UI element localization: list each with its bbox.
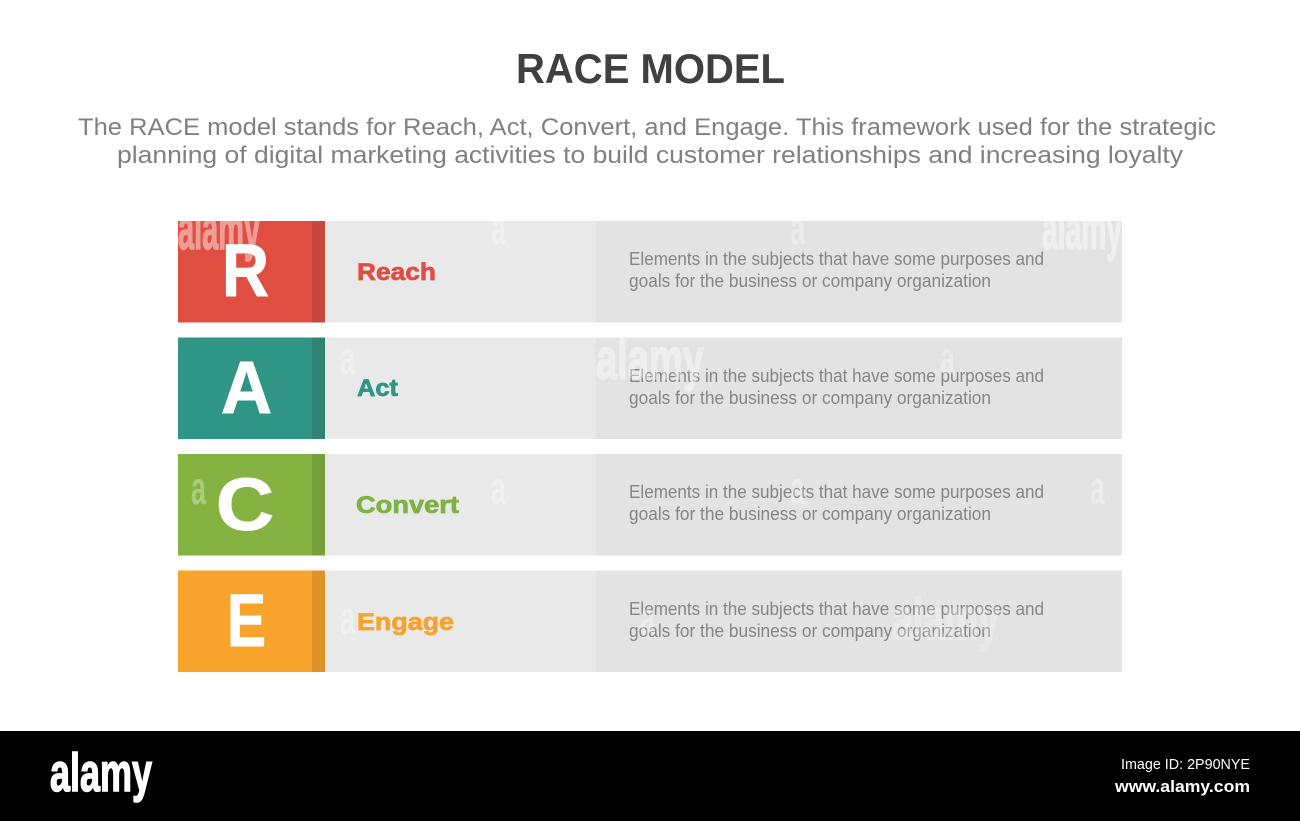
watermarks: alamy <box>892 587 999 652</box>
watermarks <box>178 197 1122 652</box>
label: Act: Act <box>357 375 398 402</box>
label: Convert: Convert <box>356 492 459 519</box>
watermarks: a <box>340 332 355 384</box>
letter C: C <box>216 463 274 546</box>
subtitle <box>78 114 1216 169</box>
footer bar <box>0 731 1300 821</box>
letter A: A <box>221 346 272 429</box>
watermarks: a <box>790 202 805 254</box>
watermarks: a <box>1090 462 1105 514</box>
letter E: E <box>227 579 266 662</box>
image id: Image ID: 2P90NYE <box>1121 756 1250 773</box>
panel: Engage row <box>178 570 1122 672</box>
description: Act <box>629 366 1044 408</box>
description: Engage: goals for the business or company organization <box>629 621 991 641</box>
panel: Reach row <box>178 221 1122 322</box>
watermarks: a <box>340 592 355 644</box>
panel: Act row <box>178 338 1122 439</box>
description: Reach <box>629 249 1044 291</box>
watermarks: a <box>940 332 955 384</box>
Engage letter block <box>178 570 312 672</box>
description: Convert: goals for the business or company organization <box>629 504 991 524</box>
watermarks: a <box>491 202 506 254</box>
description: Act: goals for the business or company organization <box>629 388 991 408</box>
description: Reach: Elements in the subjects that have some purposes and <box>629 249 1044 269</box>
subtitle: The RACE model stands for Reach, Act, Convert, and Engage. This framework used for the strategic <box>78 114 1216 141</box>
label: Engage: Engage <box>357 609 454 636</box>
text: alamy <box>1042 197 1122 262</box>
watermarks: a <box>640 592 655 644</box>
watermarks: a <box>790 462 805 514</box>
watermarks: alamy <box>178 197 260 262</box>
description: Reach: goals for the business or company organization <box>629 271 991 291</box>
description: Convert <box>629 482 1044 524</box>
watermarks: a <box>491 462 506 514</box>
Act letter block <box>178 338 312 439</box>
description: Convert: Elements in the subjects that have some purposes and <box>629 482 1044 502</box>
label: Reach: Reach <box>357 259 436 286</box>
Reach letter block <box>178 221 312 322</box>
Convert letter block <box>178 454 312 556</box>
title: RACE MODEL <box>516 45 785 92</box>
panel: Convert row <box>178 454 1122 556</box>
letter R: R <box>222 229 269 312</box>
footer logo: alamy <box>50 743 152 803</box>
description: Engage: Elements in the subjects that have some purposes and <box>629 599 1044 619</box>
watermarks: alamy <box>596 327 704 392</box>
subtitle: planning of digital marketing activities to build customer relationships and increasing loyalty <box>117 142 1183 169</box>
description: Engage <box>629 599 1044 641</box>
watermarks: a <box>191 462 206 514</box>
website: www.alamy.com <box>1114 777 1250 796</box>
description: Act: Elements in the subjects that have some purposes and <box>629 366 1044 386</box>
